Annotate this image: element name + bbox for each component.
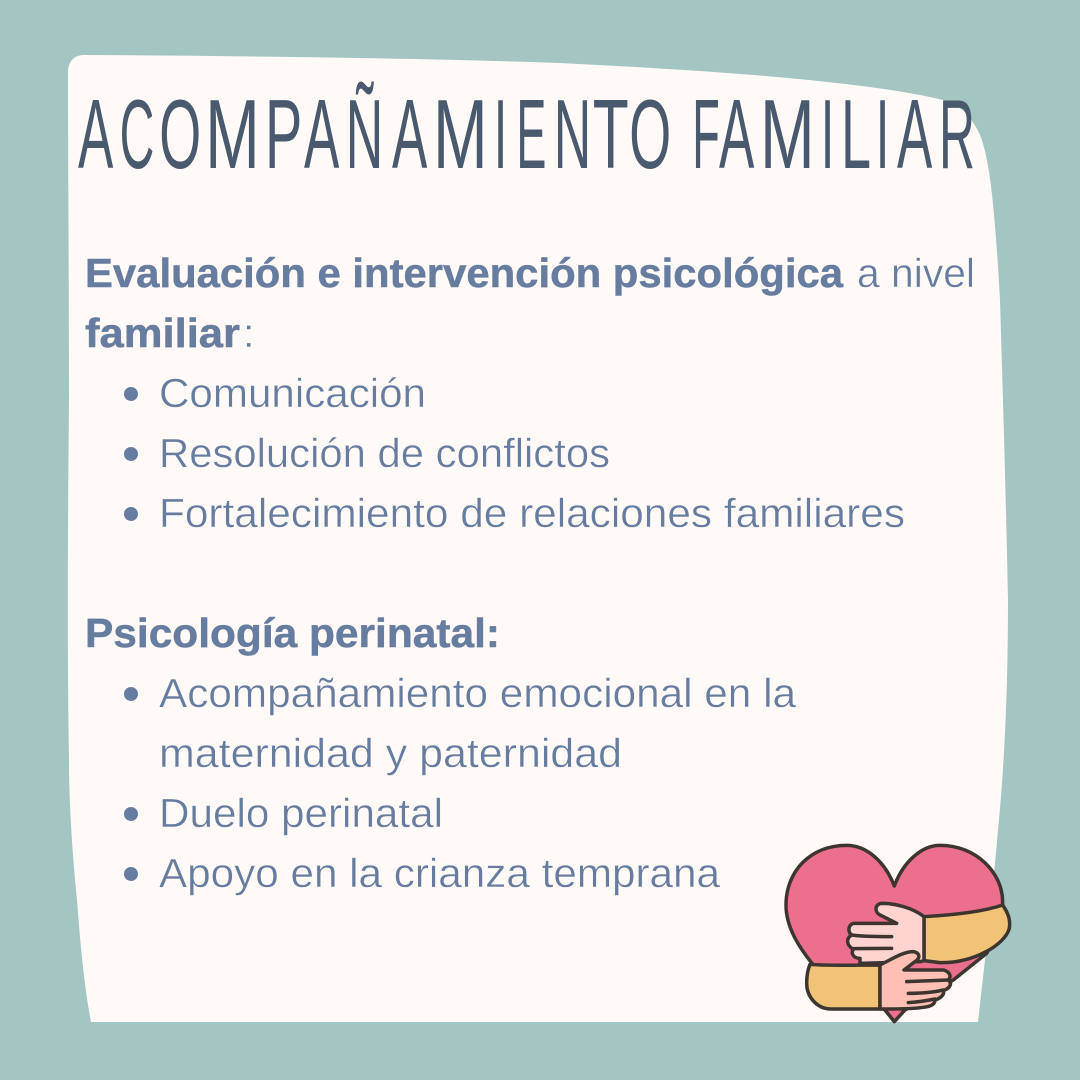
title: A — [719, 79, 755, 189]
title: R — [939, 79, 975, 189]
title: C — [120, 79, 154, 189]
bullet list: family topics: Resolución de conflictos — [159, 430, 610, 476]
title: A — [304, 79, 340, 189]
icon: heart hugged by two arms — [786, 845, 1010, 1022]
bullet list: family topics: Fortalecimiento de relaciones familiares — [159, 490, 905, 536]
heading: perinatal psychology: Psicología perinatal: — [85, 610, 500, 656]
title: M — [205, 79, 260, 189]
title: M — [760, 79, 815, 189]
bullet list: perinatal topics: Apoyo en la crianza temprana — [159, 850, 720, 896]
heart — [786, 845, 1003, 1022]
title: I — [876, 79, 889, 189]
bullet list: perinatal topics: Acompañamiento emocional en la — [159, 670, 796, 716]
right hand — [848, 903, 924, 963]
title: O — [629, 79, 671, 189]
title: L — [841, 79, 871, 189]
title: P — [265, 79, 302, 189]
text block: family evaluation heading — [85, 250, 975, 356]
text block: family evaluation heading: a nivel — [857, 250, 975, 296]
right sleeve — [924, 905, 1010, 963]
title: F — [692, 79, 720, 189]
title: A — [78, 79, 114, 189]
bullet list: family topics: Comunicación — [159, 370, 426, 416]
title: M — [433, 79, 488, 189]
title: N — [554, 79, 591, 189]
bullet list: perinatal topics: Duelo perinatal — [159, 790, 443, 836]
title: O — [159, 79, 201, 189]
panel: background card — [68, 55, 1008, 1022]
left sleeve — [807, 964, 880, 1009]
title: A — [392, 79, 428, 189]
title: I — [821, 79, 834, 189]
title: T — [593, 79, 629, 189]
bullet list: perinatal topics — [124, 670, 796, 896]
bullet list: perinatal topics: maternidad y paternidad — [159, 730, 622, 776]
title: Ñ — [346, 79, 383, 189]
title: I — [494, 79, 507, 189]
text block: family evaluation heading: : — [243, 310, 254, 356]
bullet list: family topics — [124, 370, 905, 536]
text block: family evaluation heading: Evaluación e intervención psicológica — [85, 250, 844, 296]
title: E — [516, 79, 546, 189]
left hand — [880, 952, 950, 1009]
text block: family evaluation heading: familiar — [85, 310, 240, 356]
title: A — [897, 79, 933, 189]
